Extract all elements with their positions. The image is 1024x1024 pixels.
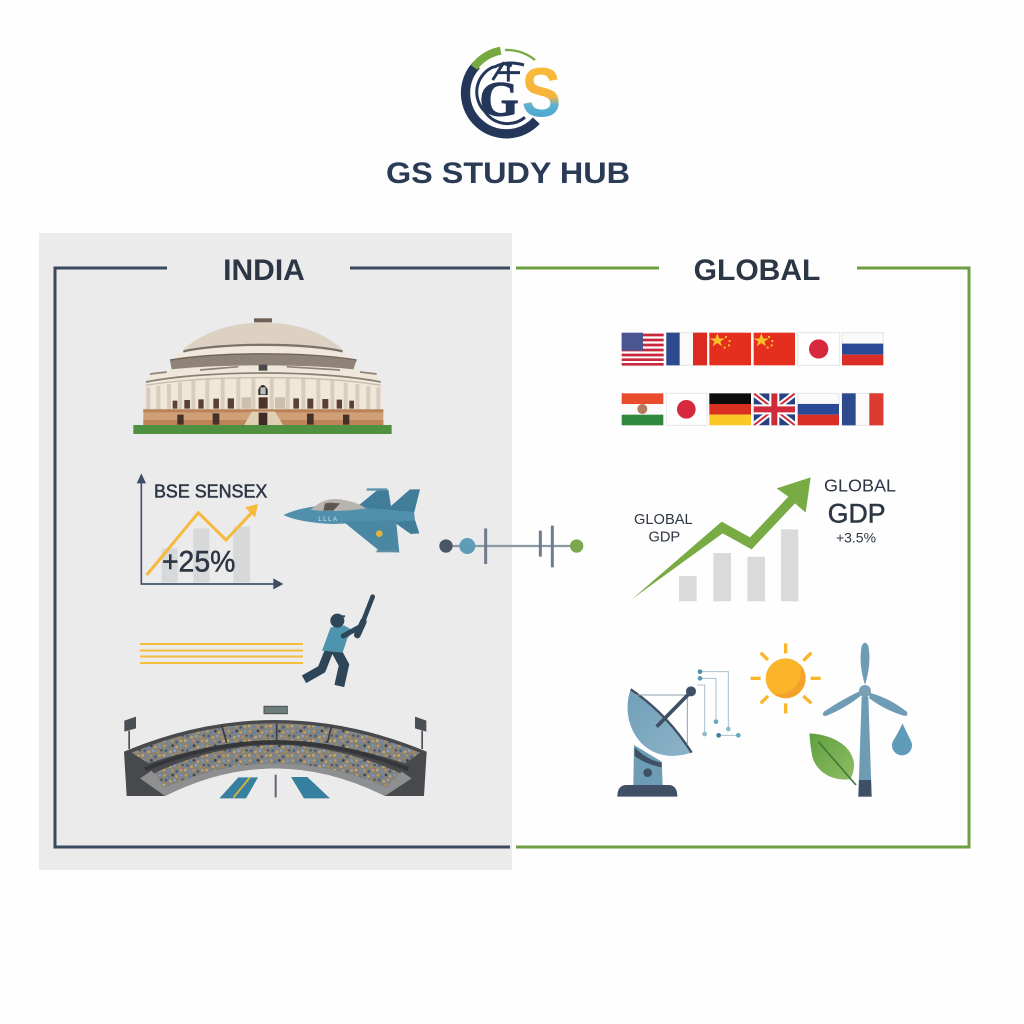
flag: Russia xyxy=(842,333,883,365)
flag: United Kingdom xyxy=(754,393,795,425)
flag: Germany xyxy=(709,393,751,425)
icon: cricket batsman xyxy=(304,597,373,686)
icon: speed lines xyxy=(140,644,303,663)
icon: fighter jet: LLLA xyxy=(318,517,337,523)
flag: Russia second xyxy=(798,393,839,425)
flag: Japan second xyxy=(666,393,707,425)
panel frame: Global xyxy=(516,268,969,847)
chart: Global GDP growth: +3.5% xyxy=(836,530,876,546)
icon: satellite dish xyxy=(617,686,696,797)
icon: cricket stadium xyxy=(124,706,427,798)
icon: wind turbine xyxy=(823,643,907,797)
chart: Global GDP growth: GLOBAL xyxy=(824,476,896,496)
heading: Global: GLOBAL xyxy=(694,254,820,287)
icon: green leaf xyxy=(809,733,856,785)
flag: China xyxy=(709,333,751,365)
chart: BSE Sensex xyxy=(137,473,283,589)
chart: Global GDP growth: GDP xyxy=(828,498,886,528)
chart: Global GDP growth: GLOBAL xyxy=(634,512,693,528)
icon: fighter jet xyxy=(283,488,420,553)
icon: parliament building xyxy=(133,318,392,434)
title: GS STUDY HUB: GS STUDY HUB xyxy=(386,157,630,190)
logo: GS globe mark xyxy=(466,50,561,134)
flag: Japan xyxy=(798,333,840,365)
icon: sun xyxy=(751,643,821,713)
panel: India background xyxy=(39,233,512,870)
chart: BSE Sensex: BSE SENSEX xyxy=(154,480,268,501)
flag: France xyxy=(666,333,707,365)
icon: data circuit lines xyxy=(697,669,741,738)
logo: GS globe mark: G xyxy=(479,70,519,126)
connector: India to Global link xyxy=(439,526,583,567)
panel frame: India xyxy=(55,268,510,847)
flag: China second xyxy=(754,333,795,365)
icon: water drop xyxy=(892,724,912,755)
heading: India: INDIA xyxy=(223,254,305,287)
flag: France second xyxy=(842,393,883,425)
chart: Global GDP growth: GDP xyxy=(648,530,680,546)
logo: GS globe mark: S xyxy=(522,54,561,132)
chart: Global GDP growth xyxy=(632,476,896,601)
flag: USA xyxy=(622,333,664,365)
icon: flags of world nations xyxy=(622,333,883,425)
flag: India xyxy=(622,393,663,425)
chart: BSE Sensex: +25% xyxy=(162,546,235,579)
